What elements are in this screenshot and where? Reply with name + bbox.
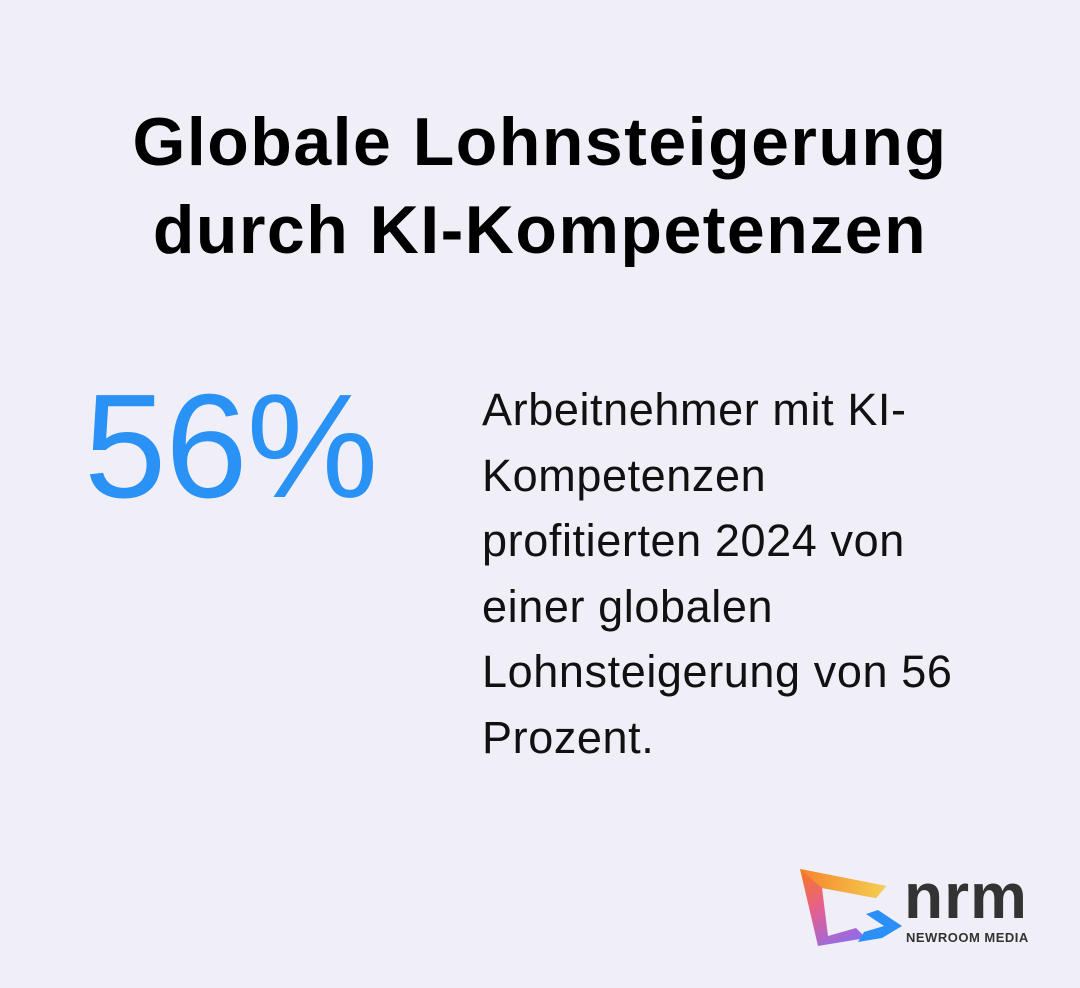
description text: einer globalen: [482, 580, 773, 632]
title: Globale Lohnsteigerung: [132, 104, 948, 180]
description text: Arbeitnehmer mit KI-: [482, 384, 907, 435]
big statistic: 56%: [84, 364, 377, 529]
description text: Kompetenzen: [482, 450, 766, 500]
description text: Lohnsteigerung von 56: [482, 646, 952, 697]
description text: [482, 384, 952, 762]
title: [132, 104, 948, 268]
title: durch KI-Kompetenzen: [153, 192, 927, 268]
description text: profitierten 2024 von: [482, 515, 905, 566]
logo: [800, 866, 1029, 946]
description text: Prozent.: [482, 712, 654, 762]
logo: NEWROOM MEDIA: [906, 930, 1029, 945]
